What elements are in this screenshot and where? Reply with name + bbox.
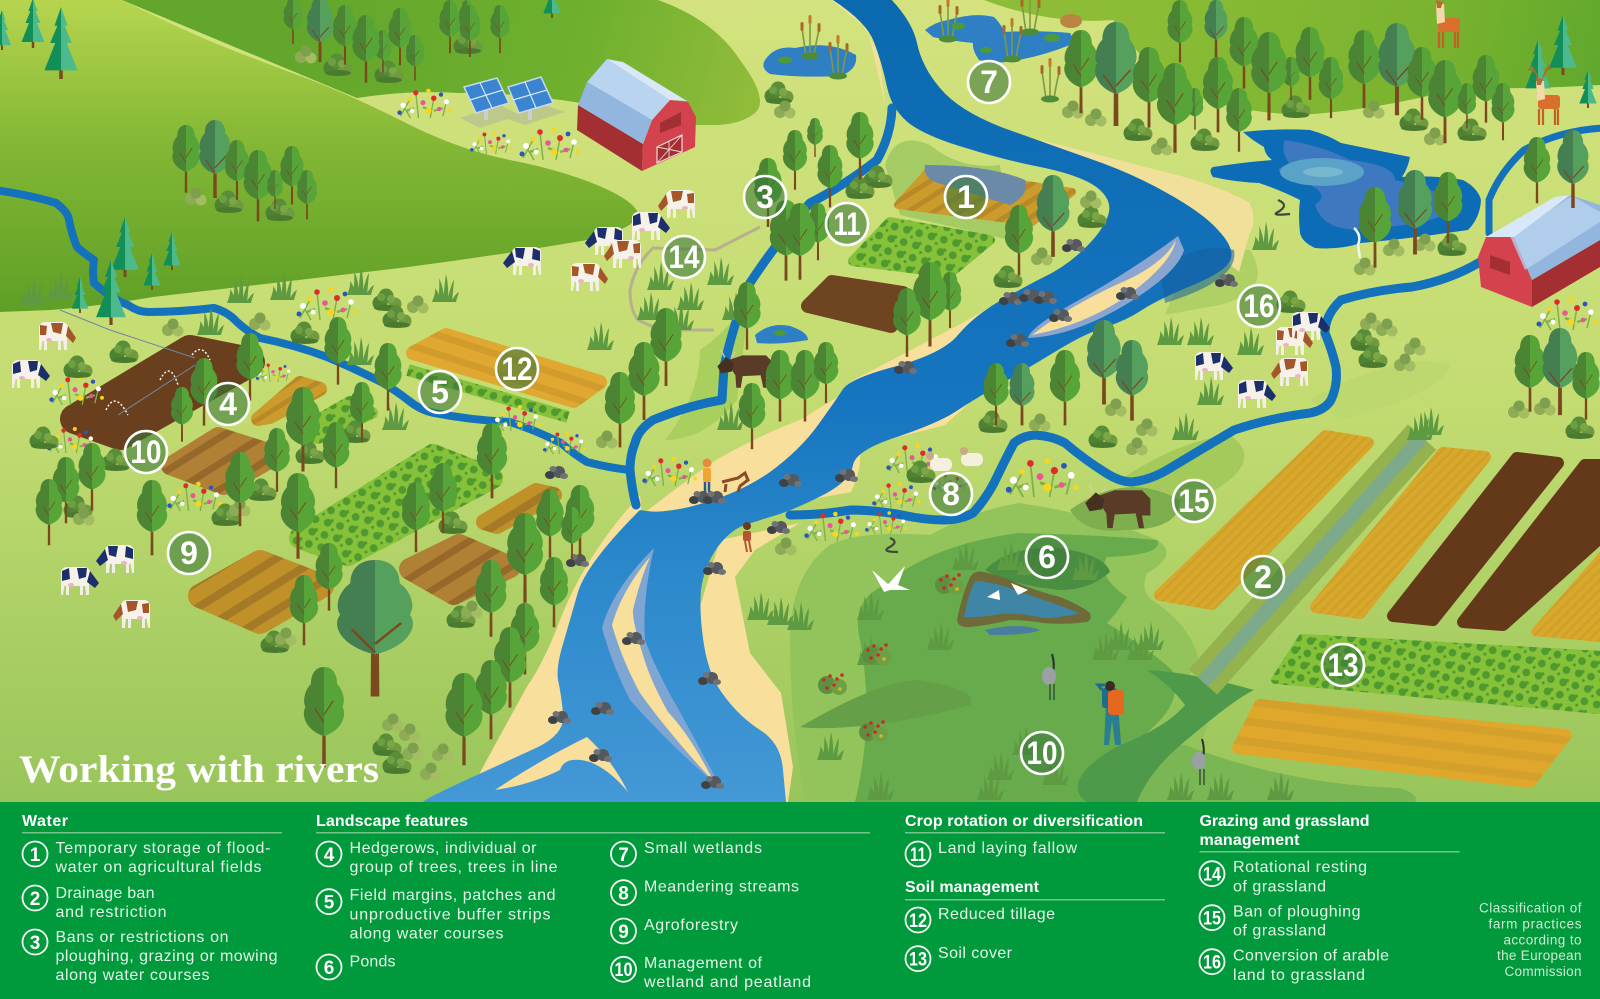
cows [12,190,1330,628]
hill: top-right forest hill [984,0,1600,115]
note: classification source: the European [1497,948,1582,963]
note: classification source [1479,900,1582,979]
marker 11: 11 [834,206,860,242]
wooden fence [630,227,760,330]
field: large crop [300,455,492,555]
streams [0,108,1600,520]
legend section: Landscape features: 8 [618,884,629,905]
marker 8 [930,473,972,515]
marker 13: 13 [1328,647,1358,683]
legend section: Landscape features: Landscape features [316,813,468,830]
river: darker shade at bend [1160,248,1234,303]
trees: top-right forest [1064,0,1515,153]
marker 5: 5 [431,374,449,410]
field: ochre lower [200,562,322,622]
marker 9: 9 [180,535,198,571]
river island: upper sandbar [1028,236,1184,338]
field: small ochre lower [484,491,554,526]
marker 6: 6 [1038,539,1056,575]
river island: sand tongue at the bottom [495,737,628,792]
water buffalo [717,350,1150,528]
legend section: Grazing and grassland management: Rotational resting [1233,859,1367,876]
legend section: Water: water on agricultural fields [54,859,262,876]
irrigation sprinklers [60,310,210,415]
legend section: Soil management: 12 [909,911,927,932]
legend section: Landscape features: 7 [618,845,629,866]
legend section: Soil management: Soil cover [938,945,1013,962]
field: ochre long 3 [1535,535,1600,640]
trees: left farmland [36,317,594,767]
legend section: Landscape features: 10 [614,960,632,981]
marker 3 [744,176,786,218]
barn: right [1478,195,1600,307]
legend section: Water [22,813,282,984]
beaver and snakes [886,14,1290,552]
cranes [1042,654,1206,785]
rocks [545,239,1238,789]
map markers [125,61,1364,774]
legend section: Landscape features: 6 [324,958,334,979]
legend section: Landscape features: Small wetlands [644,840,762,857]
legend section: Grazing and grassland management: management [1200,832,1300,849]
legend section: Grazing and grassland management: of grassland [1233,922,1326,940]
legend section: Grazing and grassland management: 14 [1203,865,1221,886]
legend section: Soil management: Reduced tillage [938,906,1055,923]
legend section: Grazing and grassland management: 15 [1203,909,1221,930]
crop fields on the left [75,165,1072,622]
wetland area: layered greens [790,487,1416,802]
legend section: Water: 3 [30,933,40,954]
field: flood storage [898,170,1072,222]
legend section: Grazing and grassland management: of grassland [1233,878,1326,896]
field: ochre horizontal [1238,705,1566,782]
field: brown-ochre strip [170,436,278,486]
flower patches [47,89,1597,541]
flood water on field [925,165,1026,205]
field: soil cover crop [1275,638,1600,712]
legend section: Water: 1 [30,845,41,866]
field: reduced tillage [413,335,600,401]
legend section: Landscape features: 9 [618,922,629,943]
note: classification source: according to [1504,932,1582,948]
pine trees [0,0,1597,325]
marker 16: 16 [1244,288,1274,324]
hill: back forest hill [122,0,760,125]
trees: right bank of the river [983,320,1148,425]
field: small brown [808,282,903,326]
trees: far right and pond [1359,130,1600,420]
legend section: Grazing and grassland management: Conversion of arable [1233,948,1389,964]
legend section: Landscape features: Field margins, patches and [350,887,556,904]
legend section: Landscape features: Management of [644,955,763,972]
legend section: Water: ploughing, grazing or mowing [56,948,278,965]
legend section: Landscape features [316,813,870,991]
legend section: Crop rotation or diversification [905,813,1165,866]
ground patches [665,140,1450,503]
legend section: Water: 2 [30,889,40,910]
drainage channel [1203,437,1422,682]
legend section: Water: Drainage ban [56,885,154,902]
field: brown-ochre lower [410,545,510,594]
big pond [1210,129,1481,248]
legend section: Landscape features: Meandering streams [644,878,799,896]
legend section: Grazing and grassland management: Grazing and grassland [1200,813,1370,830]
flying white bird [872,566,910,592]
legend section: Water: Bans or restrictions on [56,929,228,946]
small wetland: top left [763,15,856,80]
marker 9 [168,532,210,574]
stream: meander [790,262,1480,520]
marker 4 [207,383,249,425]
children and dog on the river bank [702,458,751,552]
tree: large foreground tree [337,560,413,696]
marker 2 [1242,556,1284,598]
trees: along the side channel [605,112,874,449]
marker 4: 4 [219,386,237,422]
trees: top-left forest [284,0,510,83]
marker 3: 3 [756,179,774,215]
bushes [30,32,1594,780]
field: buffer crop strip [408,370,568,417]
legend section: Landscape features: along water courses [350,926,504,942]
legend section: Soil management: Soil management [905,879,1040,896]
legend section: Grazing and grassland management: Ban of ploughing [1233,904,1360,920]
marker 5 [419,371,461,413]
legend section: Grazing and grassland management: 16 [1203,953,1221,974]
deer [1428,0,1560,125]
field: brown long 1 [1393,458,1558,620]
trees: group on the hill [172,120,317,222]
stream: along the hill and fields [0,190,630,470]
legend section: Soil management: 13 [909,950,927,971]
red flowering shrubs [818,573,964,742]
marker 8: 8 [942,476,960,512]
sand banks [475,0,1254,802]
note: classification source: farm practices [1488,916,1582,932]
marker 1 [945,176,987,218]
panel: legend [0,802,1600,999]
legend section: Landscape features: Agroforestry [644,917,738,934]
legend section: Landscape features: 5 [324,893,335,914]
legend section: Landscape features: unproductive buffer strips [350,906,550,924]
legend section: Soil management [905,879,1165,971]
legend section: Water: Water [22,813,68,830]
marker 6 [1026,536,1068,578]
small wetland: near side channel [755,325,808,344]
marker 11 [826,203,868,245]
marker 7: 7 [980,64,998,100]
stream: right edge by the barn [1489,128,1600,233]
marker 7 [968,61,1010,103]
solar panels [460,77,565,128]
legend section: Water: and restriction [56,904,166,921]
legend section: Water: along water courses [56,967,210,984]
legend section: Landscape features: 4 [324,845,335,866]
title: Working with rivers [19,748,379,791]
legend section: Landscape features: Hedgerows, individual or [350,840,537,857]
legend section: Water: Temporary storage of flood- [56,840,270,857]
marker 14: 14 [668,239,700,275]
legend section: Crop rotation or diversification: Crop rotation or diversification [905,813,1143,830]
legend section: Landscape features: wetland and peatland [643,974,811,991]
marker 1: 1 [957,179,975,215]
crop fields on the right [1160,436,1600,782]
small wetland: top centre [925,0,1072,102]
barn: left [577,59,696,171]
sheep [926,447,983,471]
marker 12: 12 [502,351,532,387]
marker 10 upper: 10 [130,434,162,470]
note: classification source: Commission [1504,964,1582,979]
stream: side channel from the river [630,108,892,505]
field: brown long 2 [1463,465,1600,625]
birdwatcher with backpack [1098,681,1124,745]
field: ochre long 2 [1316,453,1485,613]
trees: centre between river and fields [893,175,1069,357]
legend section: Grazing and grassland management [1200,813,1460,984]
note: classification source: Classification of [1479,900,1582,916]
heron [1354,228,1360,258]
legend section: Crop rotation or diversification: 11 [910,845,926,866]
field: ochre strip [258,383,320,419]
pond with swans [957,572,1091,635]
legend section: Landscape features: Ponds [350,954,396,970]
marker 2: 2 [1254,559,1272,595]
marker 10 lower: 10 [1026,735,1058,771]
field: ochre long 1 [1160,436,1368,604]
field: brown ploughed with irrigation [75,350,250,435]
hill: large foreground hill [0,0,638,312]
legend section: Grazing and grassland management: land to grassland [1233,967,1365,984]
river island: long lower sandbar [602,548,722,790]
field: small crop [297,402,372,438]
legend section: Landscape features: group of trees, trees in line [350,859,558,876]
legend section: Crop rotation or diversification: Land laying fallow [938,840,1077,857]
grass tufts [20,222,1444,800]
marker 15: 15 [1178,483,1210,519]
field: fallow crop [853,222,990,273]
river: main channel [423,0,1231,802]
